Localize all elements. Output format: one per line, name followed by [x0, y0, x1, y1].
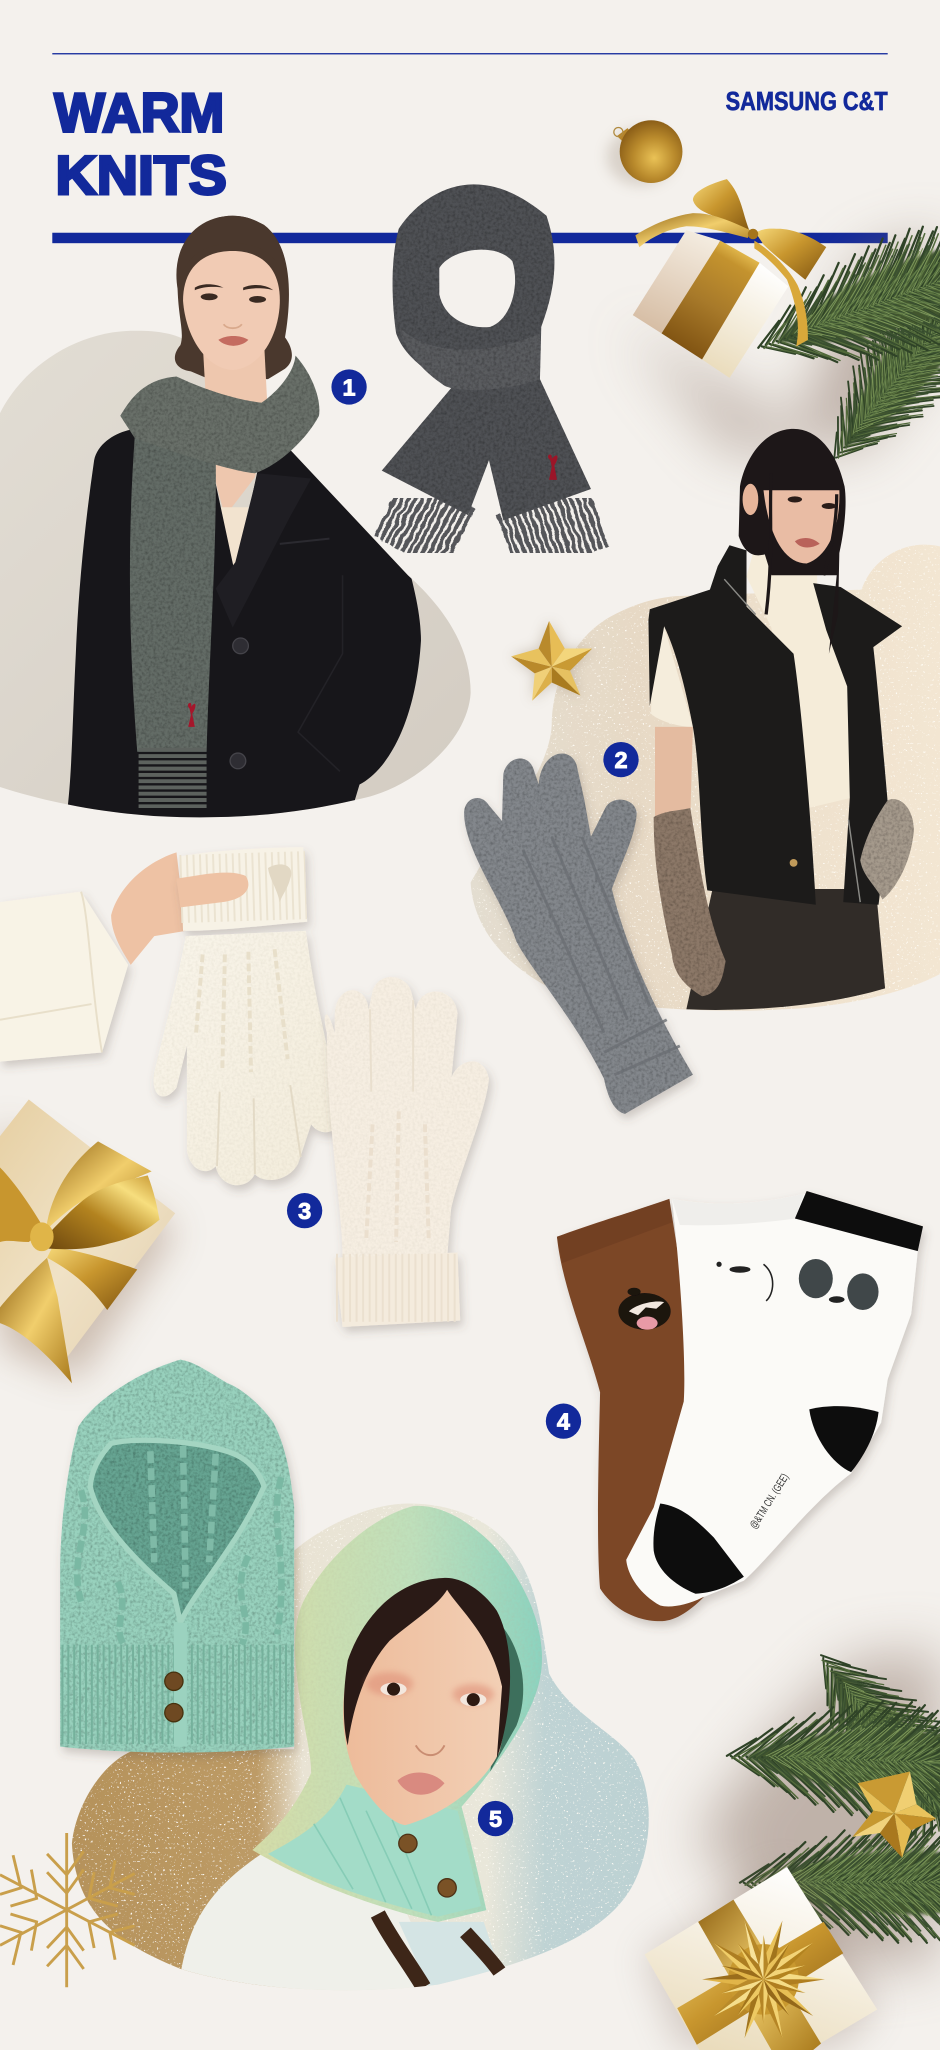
- bow left loop: [0, 1168, 44, 1242]
- bow upper back loop: [47, 1141, 152, 1229]
- heading rule: [52, 233, 888, 243]
- pine branch left: [725, 1696, 940, 1824]
- hood collar ribs: [268, 1785, 481, 1917]
- panel: model 2 with gloves: [471, 429, 940, 1011]
- badge 3: 3: [298, 1198, 311, 1224]
- scarf body: [382, 184, 591, 520]
- ball ring: [614, 127, 623, 137]
- cuff ribs: [336, 1262, 459, 1314]
- bow star back: [702, 1921, 825, 2038]
- panel: model hand holding gloves: [0, 852, 186, 1062]
- bow loop right: [756, 229, 826, 280]
- fingers on cuff: [176, 873, 248, 907]
- hood opening rim: [90, 1440, 264, 1622]
- gift shadow: [0, 1124, 176, 1379]
- model eyes and brows: [195, 284, 273, 303]
- polar bear face: [716, 1262, 773, 1301]
- scarf fringes: [390, 505, 599, 547]
- model hair front: [176, 216, 286, 290]
- title: WARM: [54, 83, 224, 143]
- panda face: [799, 1259, 879, 1310]
- scarf knot fold: [399, 327, 540, 390]
- braid right: [465, 1932, 499, 1972]
- left arm: [655, 727, 693, 817]
- scarf logo: [548, 454, 558, 480]
- long glove left: [654, 808, 726, 996]
- skirt: [686, 889, 885, 1010]
- eye shadow: [366, 1672, 494, 1705]
- scarf fringe: [147, 748, 199, 808]
- model side strands: [766, 473, 837, 614]
- white sock: [626, 1194, 923, 1606]
- ornament: gold ball: [607, 120, 682, 186]
- coat buttons: [230, 638, 248, 769]
- white sweater: [180, 1854, 503, 1994]
- vest zip: [724, 579, 860, 902]
- scarf logo: [188, 703, 196, 727]
- model hair: [739, 429, 846, 654]
- inner cables: [150, 1446, 216, 1588]
- hood ribs lines: [314, 1798, 431, 1915]
- finger separators: [217, 1085, 301, 1174]
- model face: [183, 251, 280, 370]
- bow loop top: [693, 179, 750, 233]
- top rule: [52, 53, 888, 54]
- scarf hanging end: [130, 438, 216, 752]
- bow solid core: [728, 1944, 799, 2015]
- star facets: [549, 621, 565, 667]
- brown sock cuff: [557, 1199, 672, 1263]
- panel: model 1 with scarf: [0, 216, 471, 824]
- product: grey scarf: [382, 184, 599, 547]
- ball shadow: [607, 128, 675, 186]
- coat lapel: [216, 473, 311, 628]
- black vest left: [648, 545, 816, 905]
- white coat sleeve: [0, 892, 128, 1062]
- coat pocket: [280, 539, 329, 544]
- model neck: [203, 343, 268, 516]
- gift box right panel: [702, 263, 788, 378]
- cables: [366, 1111, 429, 1242]
- decoration: left gift: [0, 1100, 176, 1383]
- braid left: [378, 1914, 424, 1987]
- model face: [764, 490, 839, 563]
- gift gold stripe: [662, 241, 760, 360]
- black coat: [65, 408, 421, 824]
- ornament: gold star: [511, 621, 592, 701]
- decoration: bottom right pine, star and gift: [645, 1622, 940, 2050]
- product: bear socks: [557, 1191, 923, 1621]
- collar shirt: [399, 1922, 494, 1986]
- brown sock: [557, 1199, 706, 1621]
- gift box: [0, 1100, 175, 1360]
- model hair back: [175, 216, 292, 379]
- nose and lips: [397, 1745, 445, 1795]
- finger separators: [370, 1000, 413, 1092]
- badge 4: 4: [557, 1409, 570, 1435]
- coat sleeve shadow: [298, 575, 343, 771]
- ribbon vertical: [698, 1900, 821, 2050]
- cuff logo: [268, 864, 291, 902]
- backdrop blob: [72, 1503, 649, 1990]
- badge 5: 5: [489, 1806, 502, 1832]
- pine shadow: [699, 1650, 940, 1974]
- bow tail right: [754, 241, 808, 346]
- gift shadow: [645, 1867, 877, 2050]
- model nose and lips: [218, 324, 248, 346]
- cuff ribs: [180, 885, 306, 889]
- camisole: [216, 507, 248, 575]
- badge 5: [478, 1801, 513, 1836]
- product: long grey glove: [464, 753, 693, 1114]
- glove hand: [154, 931, 343, 1185]
- hood: [252, 1506, 542, 1922]
- bow knot: [748, 229, 758, 239]
- pine branch top: [778, 1622, 940, 1858]
- bear face: [618, 1288, 671, 1330]
- badge 1: 1: [343, 375, 356, 401]
- cable ribs: [523, 837, 680, 1075]
- hand: [111, 852, 186, 965]
- black cuff: [795, 1191, 923, 1251]
- ball cap: [617, 128, 637, 146]
- badge 2: 2: [614, 747, 628, 773]
- model ear: [743, 484, 758, 515]
- glove body: [464, 753, 693, 1114]
- bow star front: [708, 1925, 819, 2033]
- vest right panel: [813, 583, 902, 905]
- backdrop blob: [471, 545, 940, 1011]
- long glove right: [860, 799, 914, 899]
- black heel: [809, 1406, 879, 1472]
- decoration: gold snowflake: [0, 1833, 135, 1987]
- backdrop blob: [0, 331, 471, 817]
- bow main loop: [47, 1175, 159, 1249]
- turtleneck and sweater: [747, 553, 852, 811]
- hood outer: [60, 1360, 294, 1753]
- cable knit: [77, 1477, 281, 1645]
- buttons: [165, 1672, 183, 1722]
- left sleeve: [651, 626, 693, 727]
- pine branch lower: [795, 275, 940, 491]
- gift box left panel: [633, 230, 720, 333]
- ball sphere: [620, 120, 682, 183]
- sleeve cuff line: [0, 892, 102, 1052]
- title: KNITS: [56, 146, 227, 206]
- badge 3: [287, 1193, 322, 1228]
- gift box: [645, 1867, 877, 2050]
- decoration: top right pine and gift: [628, 179, 940, 491]
- button placket: [175, 1622, 185, 1747]
- title: [54, 83, 227, 206]
- bow knot: [30, 1222, 54, 1251]
- badge 4: [546, 1403, 581, 1439]
- vest snap: [790, 859, 797, 867]
- ribbon horizontal: [677, 1922, 843, 2045]
- bow tail lower: [0, 1258, 72, 1383]
- face: [343, 1578, 508, 1825]
- sock small text: @&TM CN. (GEE): [748, 1471, 792, 1531]
- bow lower right loop: [47, 1247, 137, 1310]
- folded cuff: [180, 847, 307, 931]
- hood opening: [90, 1440, 264, 1622]
- badge 1: [331, 369, 367, 405]
- product: mint hood: [60, 1360, 294, 1753]
- pine branch lower: [740, 1822, 940, 1943]
- bow tail left: [635, 213, 750, 247]
- cuff: [335, 1252, 460, 1327]
- hood inner shadow: [490, 1628, 523, 1772]
- hair: [344, 1578, 510, 1758]
- pine branch upper: [738, 209, 940, 404]
- black toe: [653, 1503, 744, 1594]
- rib band: [61, 1656, 293, 1732]
- eyes: [380, 1683, 486, 1706]
- glove hand: [325, 977, 489, 1258]
- badge 2: [603, 742, 639, 777]
- brand name: SAMSUNG C&T: [726, 88, 888, 116]
- white sock cuff: [672, 1194, 804, 1225]
- model eyes and lips: [788, 496, 836, 548]
- product: white glove flat: [325, 977, 489, 1327]
- star shadow: [511, 621, 592, 701]
- star: [852, 1772, 936, 1858]
- cables: [196, 949, 288, 1072]
- wooden buttons: [399, 1834, 456, 1897]
- scarf wrap: [120, 356, 319, 473]
- product: white glove held: [154, 847, 343, 1185]
- panel: model 5 with hood: [72, 1503, 649, 1994]
- gift shadow: [628, 235, 940, 451]
